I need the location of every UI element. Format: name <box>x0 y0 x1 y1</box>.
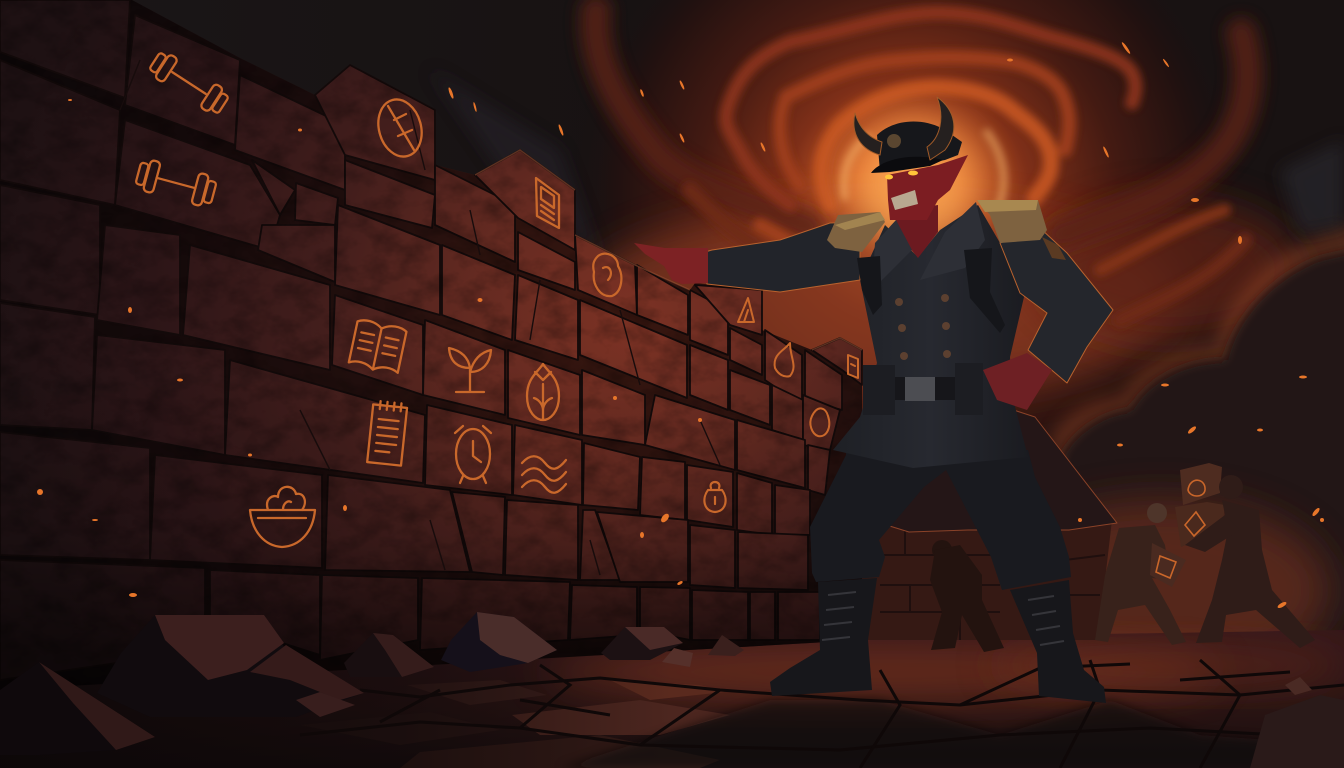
wall base silhouette <box>0 0 862 690</box>
icon: dumbbell lower <box>134 157 218 209</box>
harness straps <box>857 248 1005 333</box>
glowing eyes <box>885 170 918 180</box>
left boot <box>770 578 877 696</box>
middle rock <box>344 633 434 677</box>
lit top edge of wall <box>475 150 862 350</box>
floor shadow band <box>560 700 1344 768</box>
icon: document <box>536 178 559 228</box>
icon: leaf cluster <box>810 408 829 436</box>
belt buckle <box>905 377 935 401</box>
worker with box right <box>1185 475 1315 648</box>
floor stones <box>300 680 730 768</box>
icon: kettlebell <box>704 482 726 512</box>
rune icons on bricks <box>134 49 858 547</box>
icon: flame leaf <box>775 343 794 377</box>
wall shading <box>0 0 862 690</box>
icon: waves <box>522 456 566 493</box>
brick cracks <box>120 60 720 575</box>
right trouser leg <box>946 450 1071 590</box>
rear coat tail <box>850 400 1117 532</box>
icon: alarm clock <box>455 426 491 483</box>
soft wisp rings <box>690 13 1245 320</box>
icon: plant bulb <box>527 364 559 420</box>
worker bent behind officer <box>930 540 1004 652</box>
hip hand <box>983 353 1052 410</box>
boot laces <box>822 592 1064 645</box>
right epaulette <box>977 200 1047 243</box>
icon: dumbbell upper <box>147 49 231 117</box>
foreground right rock <box>1250 695 1344 768</box>
vortex core glow <box>844 123 1004 247</box>
coat torso <box>833 205 1028 468</box>
brick courses <box>0 0 862 680</box>
carried box stack <box>1150 463 1225 587</box>
wall of bricks <box>0 0 870 700</box>
demon officer <box>634 97 1117 703</box>
icon: small tablet <box>848 355 858 378</box>
left rock <box>0 662 155 755</box>
officer cap <box>877 122 962 172</box>
storm clouds right <box>1050 140 1344 700</box>
icon: open book <box>348 319 407 375</box>
worker with box left <box>1095 503 1186 645</box>
distant haze <box>990 500 1330 680</box>
neck and chest <box>893 205 938 258</box>
swirling vortex <box>595 10 1247 320</box>
left horn <box>854 113 882 155</box>
cap badge <box>887 134 901 148</box>
ground <box>0 630 1344 768</box>
right rocks <box>601 627 683 660</box>
teeth and tusk <box>891 190 918 210</box>
distant wall right <box>862 520 1112 640</box>
icon: salad bowl <box>250 487 315 547</box>
floating embers <box>37 41 1324 609</box>
pointing arm <box>705 222 860 292</box>
belt pouches <box>863 363 983 415</box>
rubble rocks <box>0 612 1344 768</box>
right horn <box>927 97 954 160</box>
chest buttons <box>895 294 951 360</box>
icon: no-entry round <box>372 95 428 161</box>
outer dark bands <box>595 10 1247 235</box>
pointing hand <box>634 243 708 284</box>
icon: brain cloud <box>593 254 621 296</box>
lapels <box>872 202 985 290</box>
icon: sprout <box>449 348 491 392</box>
big rock <box>97 615 364 717</box>
bent arm <box>1000 228 1113 383</box>
right boot <box>1010 580 1106 703</box>
left trouser leg <box>810 450 950 582</box>
belt <box>880 377 975 400</box>
centre rock <box>441 612 557 672</box>
left epaulette <box>827 212 885 252</box>
face <box>887 155 968 220</box>
sleeve badge <box>1042 237 1066 260</box>
icon: small leaf <box>738 298 754 322</box>
wall texture <box>30 22 861 624</box>
icon: notepad <box>367 400 407 466</box>
